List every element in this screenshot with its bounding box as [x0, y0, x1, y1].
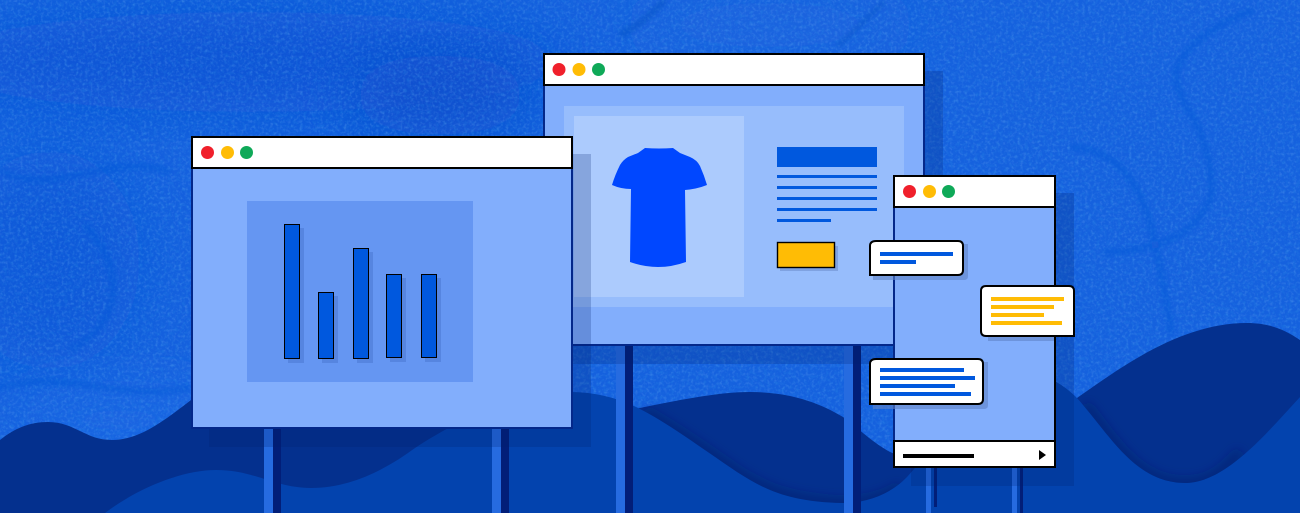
- product window drop shadow: [561, 71, 943, 364]
- chart backdrop: [247, 201, 473, 382]
- product window posts: [616, 346, 861, 513]
- product window traffic lights: [552, 63, 605, 76]
- product window body: [544, 85, 924, 345]
- chat bubble: bottom left: [870, 359, 988, 409]
- chat input bar: [894, 441, 1055, 467]
- chart window drop shadow: [209, 154, 591, 447]
- icon: t-shirt: [612, 148, 707, 267]
- bar chart: [284, 224, 441, 363]
- chat window body: [894, 207, 1055, 441]
- panel: chart window: [192, 137, 572, 428]
- medium blue front hills: [105, 370, 1300, 513]
- faint river lines in background: [0, 0, 1253, 391]
- buy button: [778, 242, 838, 271]
- chart window title bar: [192, 137, 572, 168]
- speckled shading along hill edges: [645, 405, 1240, 503]
- chat window drop shadow: [911, 193, 1074, 486]
- product page area: [564, 106, 904, 307]
- chat bubble: top left: [870, 241, 968, 280]
- dark back hills: [0, 323, 1300, 513]
- chat bubble: right yellow: [981, 286, 1074, 341]
- chat window traffic lights: [903, 185, 955, 198]
- product description lines: [777, 175, 877, 222]
- chart window traffic lights: [201, 146, 253, 159]
- panel: chat window: [870, 176, 1074, 467]
- panel: product window: [544, 54, 924, 345]
- chat window right edge: [1054, 207, 1056, 441]
- product image tile: [574, 116, 744, 297]
- chat window title bar: [894, 176, 1055, 207]
- product window title bar: [544, 54, 924, 85]
- chart window posts: [264, 429, 509, 513]
- product heading block: [777, 147, 877, 167]
- chat window posts: [926, 468, 1023, 513]
- chart window body: [192, 168, 572, 428]
